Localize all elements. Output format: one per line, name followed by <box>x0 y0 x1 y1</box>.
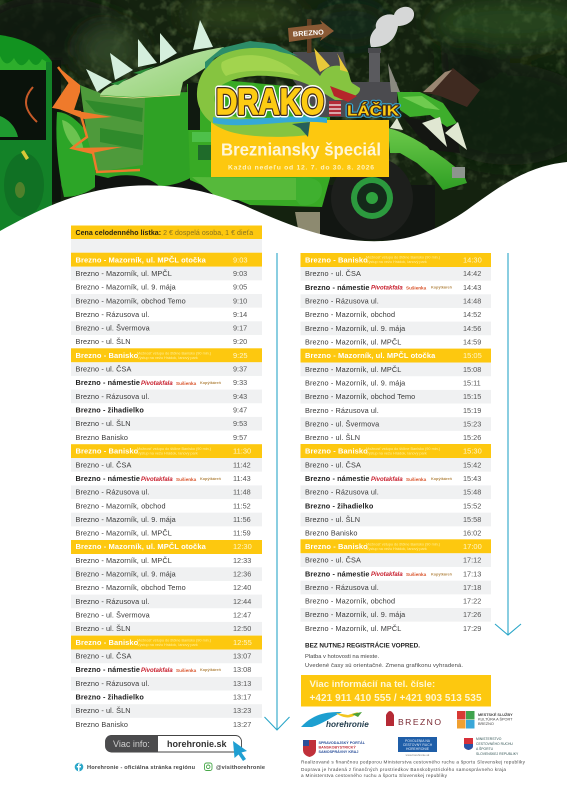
logo: Banskobystrický kraj <box>303 740 366 757</box>
block 11:30: 11:56 <box>233 515 251 524</box>
block 17:00: 17:13 <box>463 569 481 578</box>
block 12:30: Brezno - Mazorník, ul. MPČL <box>76 556 172 565</box>
block 11:30: Brezno - Banisko <box>76 446 139 456</box>
dark under the truck <box>95 170 325 205</box>
block 11:30: Brezno - Mazorník, ul. MPČL <box>76 529 172 538</box>
wheel <box>331 157 413 239</box>
registration note: Uvedené časy sú orientačné. Zmena grafikonu vyhradená. <box>305 663 463 669</box>
block 12:55: Výstup na vežu Hrádok, lanový park <box>137 643 198 647</box>
block 14:30: 14:30 <box>463 256 482 264</box>
block 14:30: Možnosť vstupu do štôlne Banisko (90 min.) <box>366 256 441 260</box>
block 12:55: Sušienka <box>176 668 197 673</box>
logo: Banskobystrický kraj: SAMOSPRÁVNY KRAJ <box>318 749 358 754</box>
registration note <box>305 640 463 669</box>
block 9:25: Pivotakfala <box>141 381 173 387</box>
block 17:00: Brezno - Banisko <box>305 542 368 551</box>
smokestack and boiler <box>369 50 380 83</box>
logo: Ministry <box>464 737 519 756</box>
icon: facebook <box>75 763 83 771</box>
logo: Ministry: SLOVENSKEJ REPUBLIKY <box>476 752 519 756</box>
block 15:30: Brezno Banisko <box>305 529 358 538</box>
block 12:55: Možnosť vstupu do štôlne Banisko (90 min.) <box>137 638 212 642</box>
block 17:00: Kopýtkáreň <box>431 572 453 576</box>
logo: tourism organization box: www.horehronie.sk <box>406 753 430 757</box>
block 11:30: Brezno - ul. ČSA <box>76 460 131 469</box>
block 11:30: 11:48 <box>233 488 251 497</box>
block 17:00: 17:00 <box>463 542 482 551</box>
arrow: right column ending <box>495 253 521 635</box>
block 17:00: 17:26 <box>463 610 481 619</box>
block 15:05: Brezno - Mazorník, ul. 9. mája <box>305 378 406 388</box>
block 17:00: Sušienka <box>406 572 427 577</box>
arrow: left column continues <box>264 253 290 730</box>
block 9:25: Možnosť vstupu do štôlne Banisko (90 min.) <box>137 352 212 356</box>
block 15:30: Kopýtkáreň <box>431 477 453 481</box>
block 12:55: 13:23 <box>233 706 251 715</box>
block 9:03: Brezno - Mazorník, ul. MPČL <box>76 269 172 278</box>
block 11:30: Pivotakfala <box>141 477 173 483</box>
logo: tourism organization box: HOREHRONIE <box>406 747 430 751</box>
block 15:30: Sušienka <box>406 477 427 482</box>
block 11:30: 11:42 <box>233 460 251 469</box>
logo: Drakoláčik: LÁČIK <box>347 102 400 120</box>
wagon <box>0 35 52 72</box>
block 15:30: Brezno - ul. ŠLN <box>305 515 360 524</box>
block 14:30 <box>300 253 491 346</box>
block 12:55: 12:55 <box>233 638 252 647</box>
logo: Mestské služby: KULTÚRA A ŠPORT <box>478 716 513 722</box>
block 12:55: Brezno - Rázusova ul. <box>76 679 149 688</box>
heading: Brezniansky špeciál <box>221 140 381 160</box>
block 9:25: Brezno - námestie <box>76 378 140 387</box>
block 9:25: 9:43 <box>233 392 247 401</box>
block 9:03: 9:10 <box>233 296 247 305</box>
block 14:30: 14:59 <box>463 338 481 346</box>
block 9:03: Brezno - Mazorník, ul. 9. mája <box>76 283 177 292</box>
block 12:30: 12:30 <box>233 542 252 551</box>
block 17:00: Možnosť vstupu do štôlne Banisko (90 min.) <box>366 542 441 546</box>
block 11:30: Sušienka <box>176 477 197 482</box>
block 17:00: 17:12 <box>463 556 481 565</box>
leaf texture <box>0 0 567 190</box>
logo: Horehronie: horehronie <box>326 720 369 729</box>
block 12:30 <box>71 540 262 636</box>
block 15:30: Pivotakfala <box>371 477 403 483</box>
contact box <box>301 675 491 706</box>
block 15:05: Brezno - ul. ŠLN <box>305 433 360 442</box>
block 14:30: Brezno - Mazorník, ul. 9. mája <box>305 324 406 333</box>
block 12:55: Brezno - ul. ČSA <box>76 652 131 660</box>
block 12:30: 12:36 <box>233 570 251 578</box>
block 9:25: Výstup na vežu Hrádok, lanový park <box>137 356 198 360</box>
block 11:30: 11:52 <box>233 501 251 510</box>
block 9:25: 9:33 <box>233 378 247 387</box>
block 14:30: Sušienka <box>406 286 427 291</box>
block 9:25: 9:37 <box>233 364 247 374</box>
block 11:30: Brezno - námestie <box>76 474 140 483</box>
block 15:05: Brezno - Mazorník, ul. MPČL otočka <box>305 351 436 360</box>
logo: Drakoláčik: DRAKO <box>216 81 324 122</box>
block 15:30: Brezno - Rázusova ul. <box>305 488 379 497</box>
logo: Banskobystrický kraj: BANSKOBYSTRICKÝ <box>318 744 356 750</box>
block 17:00: Brezno - ul. ČSA <box>305 556 361 565</box>
block 14:30: Brezno - námestie <box>305 283 370 292</box>
block 12:55: 13:27 <box>233 720 251 729</box>
logo: tourism organization box: POVOLENIA NA <box>405 739 431 743</box>
contact box: +421 911 410 555 / +421 903 513 535 <box>310 693 482 704</box>
block 12:30: Brezno - Rázusova ul. <box>76 597 149 606</box>
block 9:25: 9:25 <box>233 351 248 360</box>
logo: tourism organization box <box>398 737 437 757</box>
logo: Drakoláčik: LÁČIK <box>347 102 400 120</box>
block 15:05: Brezno - Rázusova ul. <box>305 406 379 415</box>
block 9:03: 9:20 <box>233 337 247 346</box>
block 11:30 <box>71 444 262 538</box>
block 14:30: 14:42 <box>463 269 481 278</box>
block 12:30: 12:33 <box>233 556 251 565</box>
block 14:30: 14:52 <box>463 310 481 319</box>
block 9:03 <box>71 253 262 346</box>
logo: Ministry: A ŠPORTU <box>476 746 494 751</box>
block 15:30: Brezno - námestie <box>305 474 370 483</box>
dragon illustration <box>197 46 360 137</box>
block 12:55: 13:17 <box>233 692 251 702</box>
main body <box>95 92 192 187</box>
block 9:25: 9:53 <box>233 419 247 428</box>
block 15:30: Možnosť vstupu do štôlne Banisko (90 min.) <box>366 447 441 451</box>
door <box>187 80 330 207</box>
block 12:55: Brezno - ul. ŠLN <box>76 706 131 715</box>
block 11:30: Brezno - Mazorník, ul. 9. mája <box>76 515 177 524</box>
block 17:00: Brezno - Rázusova ul. <box>305 583 379 592</box>
block 11:30: Brezno - Mazorník, obchod <box>76 501 166 510</box>
wooden direction sign: BREZNO <box>293 29 325 38</box>
block 17:00: Výstup na vežu Hrádok, lanový park <box>366 547 427 551</box>
logo: Drakoláčik: DRAKO <box>216 81 324 122</box>
block 12:30: Brezno - Mazorník, ul. 9. mája <box>76 570 177 578</box>
block 14:30: Výstup na vežu Hrádok, lanový park <box>366 260 427 264</box>
block 15:30: Výstup na vežu Hrádok, lanový park <box>366 452 427 456</box>
web link pill: Viac info: <box>113 739 150 749</box>
date line: Každú nedeľu od 12. 7. do 30. 8. 2026 <box>228 164 374 172</box>
block 12:55: Brezno Banisko <box>76 720 128 729</box>
web link pill <box>106 736 247 761</box>
block 15:30 <box>300 444 491 538</box>
block 12:55: 13:13 <box>233 679 251 688</box>
block 9:25: Brezno - Rázusova ul. <box>76 392 149 401</box>
block 9:03: Brezno - ul. ŠLN <box>76 337 131 346</box>
block 15:05: 15:26 <box>463 433 481 442</box>
block 15:05: 15:05 <box>463 351 482 360</box>
block 12:30: 12:50 <box>233 624 251 633</box>
block 9:25: Kopýtkáreň <box>200 381 222 385</box>
block 14:30: 14:48 <box>463 296 481 306</box>
title panel <box>211 120 389 177</box>
block 15:30: 15:48 <box>463 488 481 497</box>
block 17:00: 17:22 <box>463 597 481 606</box>
block 15:05: 15:08 <box>463 365 481 374</box>
timetable: left column <box>71 253 262 729</box>
block 11:30: Výstup na vežu Hrádok, lanový park <box>137 452 198 456</box>
block 14:30: Brezno - Rázusova ul. <box>305 296 379 306</box>
block 11:30: 11:43 <box>233 474 251 483</box>
block 11:30: Brezno - Rázusova ul. <box>76 488 149 497</box>
block 9:25: Brezno Banisko <box>76 433 128 442</box>
web link pill: horehronie.sk <box>167 739 228 749</box>
block 15:05: Brezno - Mazorník, ul. MPČL <box>305 365 401 374</box>
block 12:55: Brezno - Banisko <box>76 638 139 647</box>
block 14:30: Brezno - Mazorník, ul. MPČL <box>305 338 401 346</box>
block 9:25: Sušienka <box>176 381 197 386</box>
social links <box>75 763 265 771</box>
photo: dragon train in the forest <box>0 0 567 245</box>
block 17:00: Brezno - Mazorník, ul. 9. mája <box>305 610 406 619</box>
registration note: Platba v hotovosti na mieste. <box>305 654 380 660</box>
block 9:25: Brezno - ul. ČSA <box>76 364 131 374</box>
tail fin <box>54 67 140 172</box>
block 17:00: 17:18 <box>463 583 481 592</box>
block 14:30: 14:43 <box>463 283 481 292</box>
block 15:30: 15:30 <box>463 447 482 456</box>
block 17:00: Brezno - Mazorník, obchod <box>305 597 395 606</box>
block 9:03: Brezno - Mazorník, obchod Temo <box>76 296 186 305</box>
logo: Banskobystrický kraj: SPRAVODAJSKÝ PORTÁL <box>318 740 366 745</box>
block 15:05: 15:19 <box>463 406 481 415</box>
block 12:30: Brezno - ul. Švermova <box>76 610 151 620</box>
block 14:30: Brezno - ul. ČSA <box>305 269 361 278</box>
smoke puff <box>370 7 414 47</box>
block 9:03: Brezno - ul. Švermova <box>76 324 151 333</box>
dragon head on the truck <box>403 117 460 153</box>
funding note <box>301 760 526 778</box>
block 17:00: Pivotakfala <box>371 572 403 578</box>
block 15:30: Brezno - Banisko <box>305 447 368 456</box>
block 9:25 <box>71 348 262 442</box>
block 11:30: Možnosť vstupu do štôlne Banisko (90 min.) <box>137 447 212 451</box>
block 15:30: Brezno - žihadielko <box>305 501 374 510</box>
logo wordmark: DRAKO <box>216 81 324 122</box>
block 12:55: Kopýtkáreň <box>200 668 222 672</box>
block 14:30: Brezno - Banisko <box>305 256 368 264</box>
logo: Ministry: MINISTERSTVO <box>476 737 502 741</box>
block 12:30: 12:44 <box>233 597 251 606</box>
block 9:03: 9:17 <box>233 324 247 333</box>
block 12:55: 13:07 <box>233 652 251 660</box>
block 15:05: 15:15 <box>463 392 481 401</box>
block 15:30: 15:52 <box>463 501 481 510</box>
block 17:00: Brezno - námestie <box>305 569 370 578</box>
block 12:55 <box>71 636 262 729</box>
block 12:30: 12:47 <box>233 610 251 620</box>
icon: cursor <box>233 741 247 761</box>
block 17:00: 17:29 <box>463 624 481 633</box>
back hump <box>100 47 224 97</box>
rear scaled body <box>56 112 104 197</box>
block 12:55: Brezno - žihadielko <box>76 692 144 702</box>
block 9:25: 9:47 <box>233 406 247 414</box>
block 12:55: Pivotakfala <box>141 668 173 674</box>
block 12:30: 12:40 <box>233 583 251 592</box>
block 12:55: 13:08 <box>233 665 251 674</box>
block 15:30: 15:43 <box>463 474 481 483</box>
logo: Mestské služby: MESTSKÉ SLUŽBY <box>478 712 513 717</box>
social links: Horehronie - oficiálna stránka regiónu <box>87 765 196 771</box>
block 12:55: Brezno - námestie <box>76 665 140 674</box>
logo: Ministry: CESTOVNÉHO RUCHU <box>476 741 513 746</box>
block 15:05: 15:23 <box>463 419 481 428</box>
logo: tourism organization box: CESTOVNÝ RUCH <box>403 743 433 747</box>
ticket price bar: Cena celodenného lístka: 2 € dospelá osoba, 1 € dieťa <box>76 230 253 237</box>
brown roof behind head <box>423 68 480 107</box>
front fender <box>388 128 467 190</box>
block 11:30: 11:30 <box>233 446 251 456</box>
block 12:30: Brezno - Mazorník, ul. MPČL otočka <box>76 542 207 551</box>
contact box: Viac informácií na tel. čísle: <box>310 679 435 690</box>
logo: Mestské služby: BREZNO <box>478 722 494 726</box>
block 9:03: 9:03 <box>233 255 248 264</box>
logo: Drakoláčik <box>197 41 400 137</box>
block 14:30: Brezno - Mazorník, obchod <box>305 310 395 319</box>
block 15:30: 15:58 <box>463 515 481 524</box>
block 17:00 <box>300 539 491 633</box>
block 9:03: Brezno - Rázusova ul. <box>76 310 149 319</box>
logo: Horehronie <box>301 712 369 729</box>
block 15:05: 15:11 <box>463 378 481 388</box>
block 15:05: Brezno - Mazorník, obchod Temo <box>305 392 415 401</box>
logo: Brezno: BREZNO <box>398 717 441 727</box>
block 15:05: Brezno - ul. Švermova <box>305 419 380 428</box>
block 9:25: Brezno - ul. ŠLN <box>76 419 131 428</box>
block 14:30: Pivotakfala <box>371 286 403 292</box>
block 9:03: 9:14 <box>233 310 247 319</box>
block 9:25: Brezno - žihadielko <box>76 406 144 414</box>
funding note: a Ministerstva cestovného ruchu a športu Slovenskej republiky <box>301 773 448 778</box>
block 11:30: 11:59 <box>233 529 251 538</box>
blue wave stripe <box>213 116 327 125</box>
registration note: BEZ NUTNEJ REGISTRÁCIE VOPRED. <box>305 640 420 650</box>
block 15:30: Brezno - ul. ČSA <box>305 460 361 469</box>
block 15:05 <box>300 349 491 442</box>
white wave <box>0 162 567 795</box>
ticket price bar <box>71 226 262 239</box>
icon: instagram <box>204 763 212 770</box>
block 11:30: Kopýtkáreň <box>200 477 222 481</box>
block 14:30: 14:56 <box>463 324 481 333</box>
block 9:03: Brezno - Mazorník, ul. MPČL otočka <box>76 255 207 264</box>
block 12:30: Brezno - Mazorník, obchod Temo <box>76 583 186 592</box>
logo: Brezno <box>386 711 441 727</box>
block 15:30: 16:02 <box>463 529 481 538</box>
logo: Drakoláčik: LÁČIK <box>347 102 400 120</box>
social links: @visithorehronie <box>216 765 265 771</box>
block 14:30: Kopýtkáreň <box>431 286 453 290</box>
block 9:25: 9:57 <box>233 433 247 442</box>
logo: Mestské služby <box>457 711 513 728</box>
block 9:25: Brezno - Banisko <box>76 351 139 360</box>
block 12:30: Brezno - ul. ŠLN <box>76 624 131 633</box>
forest foliage <box>0 0 567 165</box>
funding note: Doprava je hradená z finančných prostriedkov Banskobystrického samosprávneho kraja <box>301 767 506 772</box>
block 15:30: 15:42 <box>463 460 481 469</box>
funding note: Realizované s finančnou podporou Ministerstva cestovného ruchu a športu Slovenskej republiky <box>301 760 526 764</box>
block 9:03: 9:05 <box>233 283 247 292</box>
block 9:03: 9:03 <box>233 269 247 278</box>
wooden direction sign <box>288 19 334 53</box>
block 17:00: Brezno - Mazorník, ul. MPČL <box>305 624 401 633</box>
spikes on dragon back <box>86 20 213 92</box>
timetable: right column <box>300 253 491 633</box>
